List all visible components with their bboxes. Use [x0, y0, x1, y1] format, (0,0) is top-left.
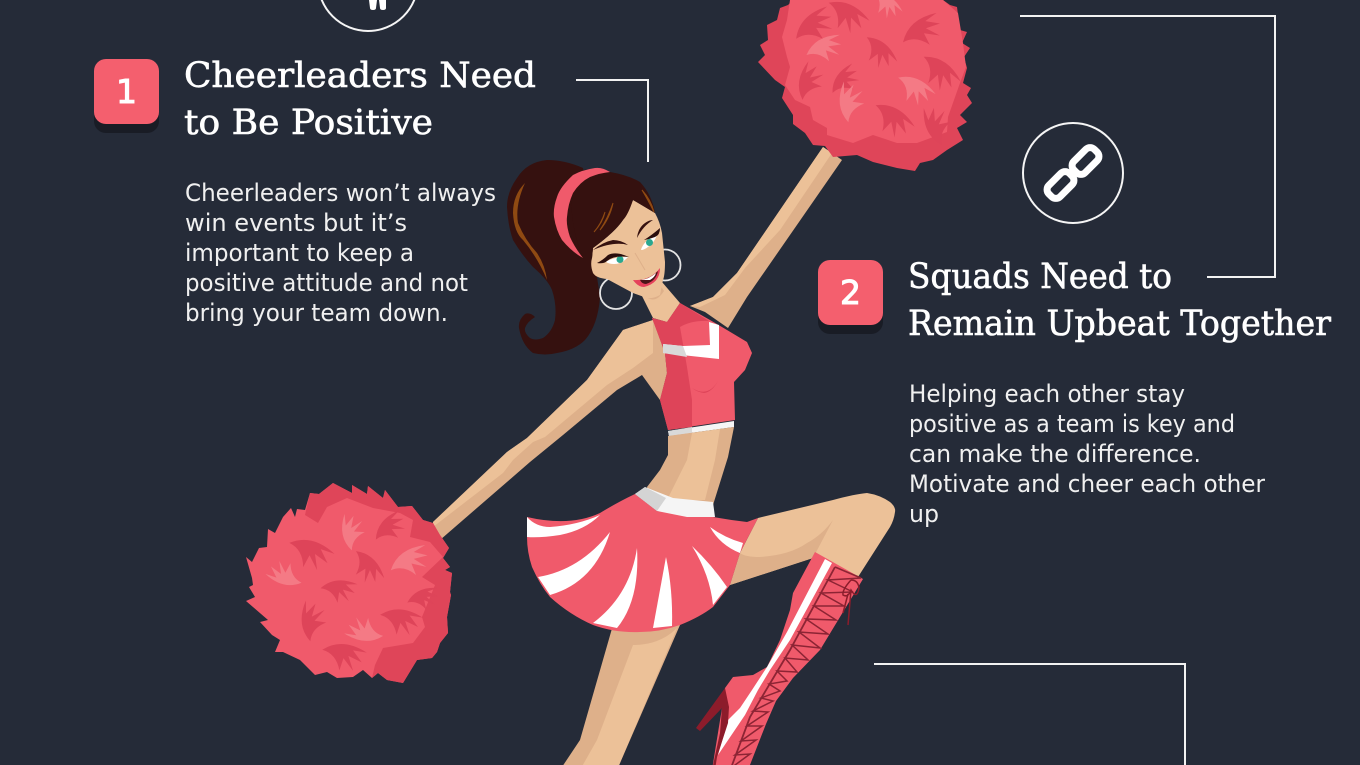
frame line: section 1	[576, 80, 648, 162]
badge: number 2	[818, 260, 883, 334]
heading: section 1: Cheerleaders Need	[184, 56, 536, 96]
front hair	[572, 169, 655, 258]
text block: section 2 body: Motivate and cheer each other	[909, 470, 1265, 498]
text block: section 2 body: can make the difference.	[909, 440, 1201, 468]
ponytail	[507, 160, 600, 354]
badge: number 1: 1	[116, 72, 137, 111]
text block: section 1 body: important to keep a	[185, 239, 414, 267]
text block: section 2 body	[909, 380, 1265, 528]
facial features	[593, 220, 660, 287]
text block: section 2 body: up	[909, 500, 939, 528]
heading: section 2: Remain Upbeat Together	[908, 304, 1331, 344]
earrings	[600, 250, 680, 309]
skirt	[527, 487, 758, 632]
heading: section 1	[184, 56, 536, 143]
icon: chain link in circle	[1023, 123, 1123, 223]
text block: section 1 body: Cheerleaders won’t always	[185, 179, 496, 207]
neck shadow	[645, 285, 664, 300]
crop top	[652, 303, 752, 436]
text block: section 1 body: positive attitude and not	[185, 269, 468, 297]
headband	[554, 168, 610, 258]
text block: section 1 body: bring your team down.	[185, 299, 448, 327]
neck	[640, 282, 680, 322]
badge: number 1	[94, 59, 159, 133]
text block: section 2 body: Helping each other stay	[909, 380, 1185, 408]
pom-pom: upper right	[758, 0, 972, 171]
text block: section 1 body: win events but it’s	[185, 209, 407, 237]
pom-pom: lower left	[246, 483, 452, 683]
heading: section 2: Squads Need to	[908, 257, 1172, 297]
midriff	[647, 427, 734, 505]
heading: section 2	[908, 257, 1331, 344]
waistband	[635, 487, 715, 517]
raised thigh	[730, 493, 895, 585]
text block: section 2 body: positive as a team is key and	[909, 410, 1235, 438]
boot	[696, 552, 863, 765]
right arm	[690, 147, 842, 328]
face	[591, 200, 665, 298]
illustration: cheerleader	[246, 0, 972, 765]
badge: number 2: 2	[840, 273, 861, 312]
frame line: section 2	[1020, 16, 1275, 277]
icon: top circle with figure legs	[318, 0, 418, 31]
text block: section 1 body	[185, 179, 496, 327]
heading: section 1: to Be Positive	[184, 103, 433, 143]
standing leg	[560, 625, 680, 765]
left arm	[433, 320, 667, 540]
frame line: section 3	[874, 664, 1185, 765]
